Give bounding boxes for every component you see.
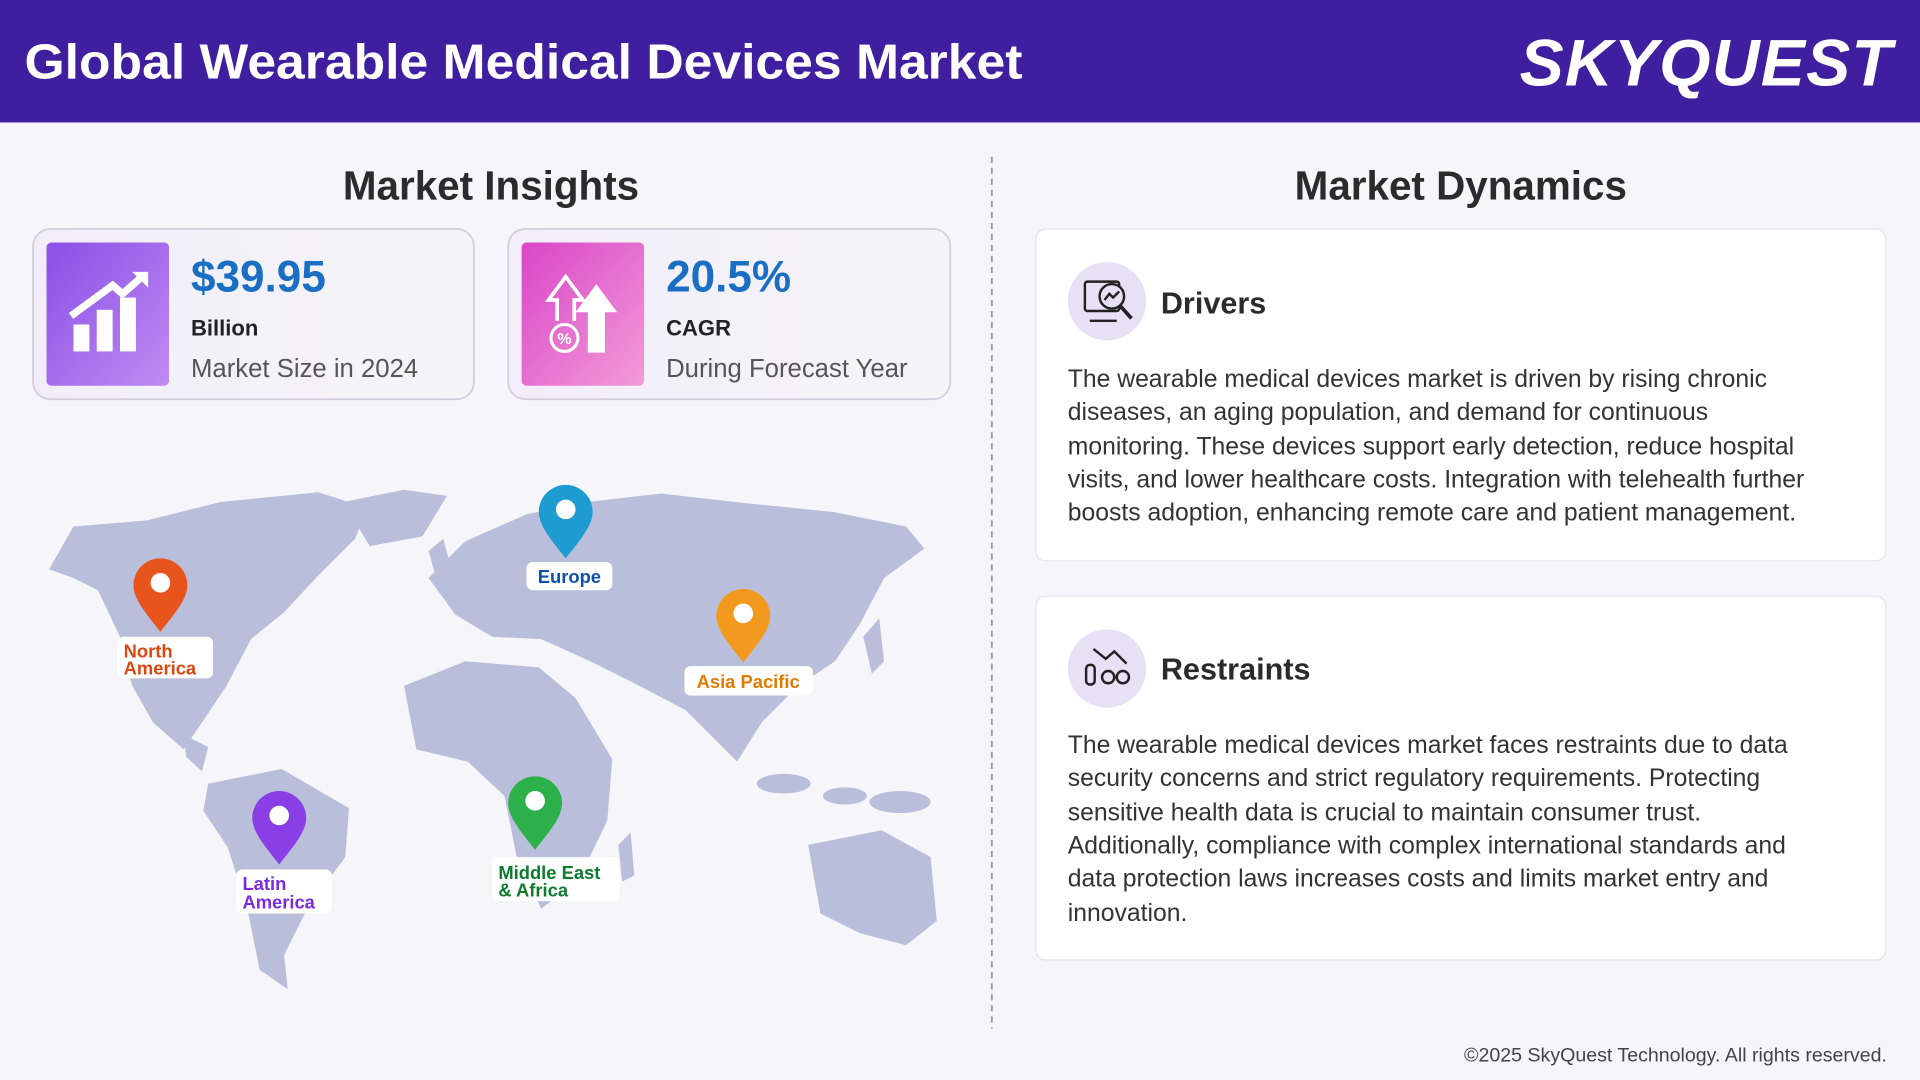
panel: restraints: Restraints <box>1161 653 1311 687</box>
header bar <box>0 0 1920 122</box>
heading: Market Dynamics: Market Dynamics <box>1295 163 1627 209</box>
title: Global Wearable Medical Devices Market <box>24 35 1022 89</box>
panel: restraints <box>1036 596 1886 960</box>
pin: Latin America: Latin <box>242 873 286 894</box>
world map <box>49 490 937 989</box>
value: 20.5% <box>666 252 791 301</box>
icon: drivers <box>1068 262 1146 340</box>
text: drivers: visits, and lower healthcare costs. Integration with telehealth further <box>1068 466 1804 493</box>
text: restraints: The wearable medical devices market faces restraints due to data <box>1068 732 1788 759</box>
text: drivers: monitoring. These devices support early detection, reduce hospital <box>1068 433 1794 460</box>
icon: bar chart <box>47 242 169 386</box>
pin: North America <box>118 558 213 679</box>
card: CAGR: During Forecast Year <box>666 355 908 383</box>
pin: Middle East & Africa: & Africa <box>498 879 569 900</box>
card: CAGR: CAGR <box>666 316 731 341</box>
pin: Europe: Europe <box>538 566 601 587</box>
text: restraints: data protection laws increases costs and limits market entry and <box>1068 866 1768 893</box>
text: drivers: boosts adoption, enhancing remote care and patient management. <box>1068 499 1796 526</box>
card: CAGR <box>508 229 950 399</box>
card: market size: Market Size in 2024 <box>191 355 418 383</box>
text: restraints: security concerns and strict regulatory requirements. Protecting <box>1068 765 1760 792</box>
pin: North America: North <box>124 641 173 662</box>
panel: drivers: Drivers <box>1161 286 1266 320</box>
pin: Latin America <box>236 791 332 913</box>
pin: Europe <box>527 485 612 590</box>
panel: drivers <box>1036 229 1886 561</box>
pin: Middle East & Africa <box>492 776 620 901</box>
icon: growth arrows <box>522 242 644 386</box>
pin: Middle East & Africa: Middle East <box>498 862 600 883</box>
card: market size <box>33 229 474 399</box>
icon: restraints <box>1068 629 1146 708</box>
text: drivers: diseases, an aging population, and demand for continuous <box>1068 399 1708 426</box>
icon: growth arrows: % <box>557 331 572 348</box>
text: restraints: innovation. <box>1068 900 1187 927</box>
pin: Asia Pacific <box>684 589 813 696</box>
heading: Market Insights: Market Insights <box>343 163 639 209</box>
pin: Asia Pacific: Asia Pacific <box>697 671 800 692</box>
text: drivers: The wearable medical devices market is driven by rising chronic <box>1068 366 1767 393</box>
value: $39.95 <box>191 252 326 301</box>
text: restraints: sensitive health data is crucial to maintain consumer trust. <box>1068 799 1701 826</box>
footer: ©2025 SkyQuest Technology. All rights reserved. <box>1464 1045 1887 1067</box>
text: restraints: Additionally, compliance with complex international standards and <box>1068 832 1786 859</box>
card: market size: Billion <box>191 316 258 341</box>
logo: SKYQUEST <box>1520 27 1897 101</box>
pin: Latin America: America <box>242 892 316 913</box>
pin: North America: America <box>124 658 197 679</box>
